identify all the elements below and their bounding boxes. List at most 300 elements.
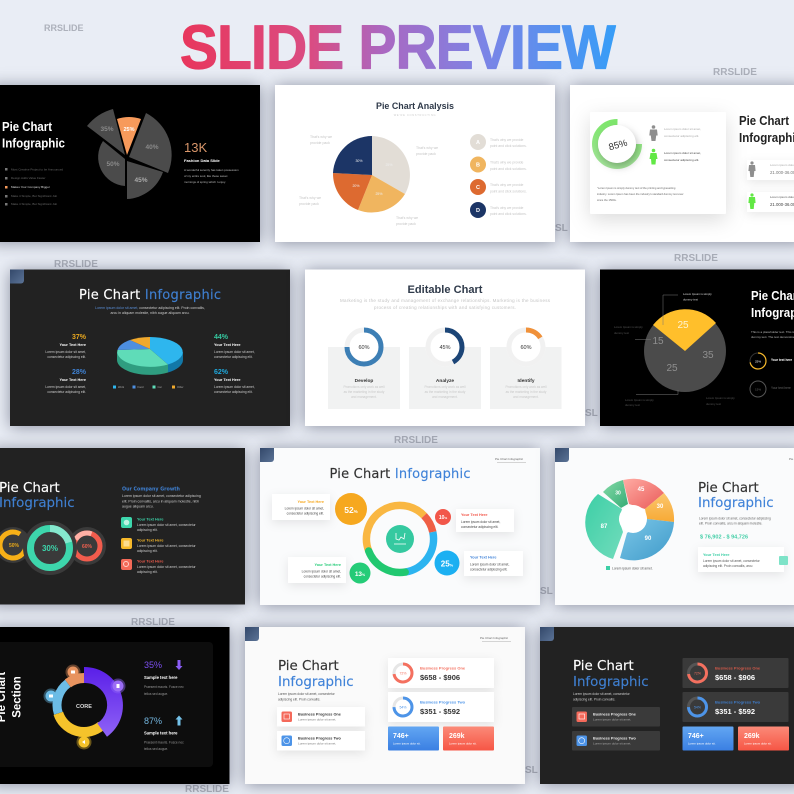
stat card one: Business Progress One [715,666,761,670]
pie legend: Car [158,385,162,389]
heading: Infographic [2,136,65,150]
progress rings [750,353,792,397]
left stats: Lorem ipsum dolor sit amet, [45,350,86,354]
callout blue [464,551,523,576]
inner panel [0,642,213,767]
ring chart [366,505,434,573]
stat 35 percent: Praesent mauris. Fusce nec [144,685,184,689]
pie labels: dummy text [614,331,629,335]
slide badge [540,627,554,641]
heading: Pie Chart Infographic [330,467,470,482]
legend: point and click solutions. [490,144,527,148]
stat card two: Business Progress Two [420,700,466,704]
stat card one: $658 - $906 [715,673,755,682]
exploded pie chart: 25% [123,127,135,133]
right stats: consectetur adipiscing elit. [214,390,253,394]
pie labels: That's why we [396,216,418,220]
bubble 10 percent: 10% [439,515,447,521]
progress rings: 25% [755,360,761,364]
legend: point and click solutions. [490,190,527,194]
heading: Pie Chart [2,119,53,134]
legend: point and click solutions. [490,167,527,171]
donut 85 percent: 85% [608,138,629,153]
callout yellow [272,494,330,520]
left stats: 28% [72,369,87,376]
pie labels: Lorem Ipsum is simply [625,398,654,402]
heading [698,481,774,511]
card develop: Promotions only work as well [343,385,385,389]
left stats: 37% [72,334,87,341]
pie legend [113,385,184,389]
heading: Editable Chart [408,284,483,296]
pie chart: 20% [352,184,360,188]
callout red [456,509,514,532]
heading: Pie Chart Analysis [376,101,454,112]
card develop: 60% [358,345,370,351]
icon: green person [650,149,658,164]
card identify [490,328,562,409]
growth item red: adipiscing elit. [137,570,158,574]
growth text: Lorem ipsum dolor sit amet, consectetur adipiscing [122,494,201,498]
slide badge [260,448,274,462]
icon: grey person [649,125,658,141]
icon: purple node [110,678,126,694]
callout [698,547,788,572]
watermarks: SL [555,223,568,234]
stat card one: $658 - $906 [420,673,460,682]
red stat box: 269k [449,733,465,740]
heading: Infographic [573,675,649,690]
right stats: 62% [214,369,229,376]
blue stat box: 746+ [688,733,704,740]
growth text: augue aliquam arcu. [122,504,154,508]
3D pie chart [117,337,183,375]
legend: D [476,208,480,214]
card progress one: Business Progress One [298,712,341,716]
donut teal 30 percent [23,521,77,575]
subtitle [95,306,205,315]
top-right tag [495,457,526,462]
rotated heading: Section [12,676,24,718]
heading: Pie Chart [698,481,759,496]
panel: business progress light slide [245,627,525,784]
card analyze: as the marketing in the study [425,390,466,394]
heading: Pie Chart [278,659,339,674]
panel: segmented pie slide [555,448,794,605]
top-right tag: Pie Chart Infographic [480,636,509,640]
legend: C [476,185,480,191]
left stats: consectetur adipiscing elit. [47,390,86,394]
pie labels [299,135,438,226]
growth item red [121,559,197,574]
card identify: 60% [520,345,532,351]
legend: That's why we provide [490,138,524,142]
slide badge [245,627,259,641]
donut teal 30 percent: 30% [42,544,58,553]
top-right tag [480,636,511,642]
heading: Infographic [278,675,354,690]
panel: core pie section slide [0,627,230,784]
pie labels: That's why we [299,196,321,200]
watermarks: RRSLIDE [131,617,175,628]
pie legend: Other [177,385,184,389]
panel: black yellow pie slide [600,270,794,426]
red stat box: Lorem ipsum dolor sit. [449,742,477,746]
leader lines [635,295,678,394]
stat card one [682,658,788,688]
pie legend: Lorem ipsum dolor sit amet. [612,566,653,570]
blue stat box: Lorem ipsum dolor sit. [393,742,421,746]
stat 13K: mornings of spring which I enjoy. [184,180,226,184]
callout: Lorem ipsum dolor sit amet, consectetur [703,559,761,563]
bubble 13 percent: 13% [355,571,366,578]
heading [573,659,649,690]
panel: pie chart analysis slide: WE'RE CONSTRUCTING [394,113,436,117]
panel: dark 3D pie slide [10,270,290,426]
pie labels: provide pack [310,141,330,145]
pie chart: 25 [677,320,689,331]
stat card one [388,658,494,688]
card progress one: Lorem ipsum dolor sit amet. [593,718,631,722]
watermarks: RRSLIDE [713,67,757,78]
stat 87 percent: Sample text here [144,730,178,736]
stat 13K [184,140,239,184]
donut yellow 50 percent [0,527,31,563]
watermarks: SL [585,408,598,419]
heading [739,113,794,145]
stat 35 percent [144,660,184,696]
heading [2,119,65,150]
pie chart: 15 [652,336,664,347]
right stats: consectetur adipiscing elit. [214,355,253,359]
card progress two: Business Progress Two [593,736,636,740]
pie labels: dummy text [683,298,698,302]
legend: That's why we provide [490,160,524,164]
subtitle: process of creating relationships with and satisfying customers. [374,305,516,310]
stat 87 percent: Praesent mauris. Fusce nec [144,740,184,744]
stat 87 percent: 87% [144,716,162,726]
pie chart [644,309,726,392]
heading: Pie Chart Infographic [79,288,221,303]
card identify: Identify [517,378,535,384]
legend: A [476,140,480,146]
progress rings: Your text here [771,386,791,390]
callout green: Your Text Here [315,563,341,567]
stat cards [747,160,794,212]
growth item teal: Lorem ipsum dolor sit amet, consectetur [137,523,197,527]
right stats: Your Text Here [214,378,240,382]
callout blue: Your Text Here [470,556,496,560]
watermarks: RRSLIDE [54,259,98,270]
heading: Infographic [698,496,774,511]
segmented pie chart: 90 [645,536,652,542]
watermarks: RRSLIDE [394,435,438,446]
growth item red: Lorem ipsum dolor sit amet, consectetur [137,565,197,569]
stat 13K: A wonderful serenity has taken possession [184,168,239,172]
panel: editable chart slide [305,270,585,426]
legend: That's why we provide [490,183,524,187]
pie labels: provide pack [416,152,436,156]
card develop: as the marketing in the study [344,390,385,394]
person text [664,127,701,162]
right stats: Lorem ipsum dolor sit amet, [214,350,255,354]
card develop: and management. [351,395,377,399]
card analyze: Analyze [436,378,454,384]
pie chart: 25% [375,192,383,196]
bubble 13 percent [350,562,370,584]
growth item teal [121,517,197,532]
legend: point and click solutions. [490,212,527,216]
stat 35 percent: Sample text here [144,675,178,680]
segmented pie chart: 30 [615,490,621,496]
watermarks: SL [540,586,553,597]
callout red: Your Text Here [461,513,487,517]
watermarks: RRSLIDE [674,253,718,264]
segmented pie chart: 30 [657,504,664,510]
person text: Lorem ipsum dolor sit amet, [664,151,701,155]
progress rings: Your text here [771,358,792,362]
bullet list: Makes Your Company Bigger [11,185,50,189]
right stats: Lorem ipsum dolor sit amet, [214,385,255,389]
growth text: elit. Proin convallis, arcu in aliquam molestie, nibh [122,500,199,504]
legend: That's why we provide [490,206,524,210]
pie labels: That's why we [416,146,438,150]
red stat box [738,726,789,750]
exploded pie chart: 40% [145,144,159,151]
panel: pie chart analysis slide [275,85,555,242]
growth item yellow: Your Text Here [137,538,163,542]
growth text [122,486,201,508]
description: adipiscing elit. Proin convallis. [278,698,320,702]
segmented pie chart: 87 [601,524,608,530]
subtitle: Marketing is the study and management of exchange relationships. Marketing is the business [340,298,551,303]
card progress two [277,731,365,750]
stat card two: 54% [399,706,407,710]
inner card [590,112,726,214]
heading: Pie Chart [0,481,60,496]
stat 87 percent: tellus sed augue. [144,747,168,751]
price range: $ 76,902 - $ 94,726 [700,534,748,540]
core ring chart: CORE [76,704,92,710]
pie chart: 25 [666,363,678,374]
stat card two: 54% [694,706,701,710]
rotated heading [0,672,24,722]
pie labels: dummy text [625,403,640,407]
card develop [328,328,400,409]
icon: orange node [66,664,80,680]
watermarks: RRSLIDE [44,23,84,33]
bullet list: Make it Simple, But Significant Job [11,194,58,198]
panel: ring infographic slide [260,448,540,605]
stat 13K: 13K [184,140,207,155]
legend [470,134,527,218]
bubble 52 percent: 52% [344,505,358,515]
slide badge [10,270,24,284]
card progress two: Lorem ipsum dolor sit amet. [593,742,631,746]
pie legend: Work [118,385,125,389]
panel: company growth dark slide [0,448,245,604]
bubble 25 percent: 25% [441,560,454,568]
donut note [597,186,684,202]
callout: Your Text Here [703,553,729,557]
subtitle [340,298,551,310]
pie chart: 30% [355,159,363,163]
stat card two: $351 - $592 [715,707,755,716]
right stats [214,334,255,394]
bubble 10 percent [435,509,451,525]
exploded pie chart: 45% [134,177,148,184]
pie labels [614,292,735,407]
card analyze [409,328,481,409]
stat 35 percent: 35% [144,660,162,670]
callout yellow: consectetur adipiscing elit. [287,512,324,516]
donut yellow 50 percent: 50% [9,543,20,549]
title: SLIDE PREVIEW [180,14,616,82]
left stats: Your Text Here [60,378,86,382]
description: Lorem ipsum dolor sit amet, consectetur adipiscing [699,516,771,520]
icon: yellow node [76,734,92,750]
callout red: Lorem ipsum dolor sit amet, [461,520,500,524]
exploded pie chart [87,109,172,199]
stat card one: Business Progress One [420,666,466,670]
core ring chart [57,667,123,737]
callout: adipiscing elit. Proin convallis, arcu [703,564,753,568]
description: elit. Proin convallis, arcu in aliquam molestie. [699,522,763,526]
card develop: Develop [355,378,373,384]
donut note: "Lorem Ipsum is simply dummy text of the printing and typesetting [597,186,676,190]
callout green: Lorem ipsum dolor sit amet, [302,570,341,574]
segmented pie chart [585,479,674,560]
red stat box [443,726,494,750]
callout blue: consectetur adipiscing elit. [470,568,507,572]
card progress two: Business Progress Two [298,736,341,740]
bullet list [5,168,63,206]
description [699,516,771,526]
description: Lorem ipsum dolor sit amet, consectetur [573,692,631,696]
heading [751,288,794,320]
pie labels: provide pack [299,202,319,206]
callout green [288,557,346,583]
bullet list: Make it Simple, But Significant Job [11,202,58,206]
left stats: Lorem ipsum dolor sit amet, [45,385,86,389]
exploded pie chart: 50% [106,161,120,168]
card progress one [572,707,660,726]
icon: blue node [44,688,58,704]
card identify: and management. [513,395,539,399]
callout green: consectetur adipiscing elit. [304,574,341,578]
stat card one: 72% [399,672,407,676]
pie labels: Lorem Ipsum is simply [683,292,712,296]
red stat box: Lorem ipsum dolor sit. [744,742,772,746]
person text: consectetur adipiscing elit. [664,158,699,162]
left stats: consectetur adipiscing elit. [47,355,86,359]
pie labels: Lorem Ipsum is simply [706,396,735,400]
callout yellow: Lorem ipsum dolor sit amet, [285,506,324,510]
description [573,692,631,702]
exploded pie chart: 35% [100,126,114,133]
panel: dark exploded pie slide [0,85,260,242]
pie chart: 25% [385,163,393,167]
top-right tag: Pie Chart Infographic [495,457,524,461]
person text: Lorem ipsum dolor sit amet, [664,127,701,131]
stat card two: $351 - $592 [420,707,460,716]
blue stat box [682,726,734,750]
card progress one: Lorem ipsum dolor sit amet. [298,718,336,722]
card analyze: Promotions only work as well [424,385,466,389]
blue stat box: Lorem ipsum dolor sit. [688,742,716,746]
watermarks: SL [525,765,538,776]
pie chart [333,136,410,213]
progress rings: 15% [755,388,761,392]
callout blue: Lorem ipsum dolor sit amet, [470,562,509,566]
heading [0,481,75,511]
slide badge [555,448,569,462]
donut red 60 percent: 60% [82,544,93,550]
subtitle: Lorem ipsum dolor sit amet, consectetur adipiscing elit. Proin convallis, [95,306,205,310]
donut note: industry. Lorem Ipsum has been the industry's standard dummy text ever [597,192,684,196]
right stats: Your Text Here [214,343,240,347]
growth item yellow [121,538,197,553]
stat card two [682,692,788,722]
subtitle: arcu in aliquam molestie, nibh augue aliquam arcu. [110,311,190,315]
pie labels: provide pack [396,222,416,226]
donut note: since the 1500s. [597,198,617,202]
card progress two [572,731,660,750]
pie legend: Food [138,385,144,389]
stat 87 percent [144,716,184,751]
growth item teal: adipiscing elit. [137,528,158,532]
stat card two [388,692,494,722]
card progress one: Business Progress One [593,712,636,716]
card analyze: and management. [432,395,458,399]
bubble 52 percent [335,493,367,525]
heading: Pie Chart [573,659,634,674]
card identify: Promotions only work as well [505,385,547,389]
growth item red: Your Text Here [137,560,163,564]
card progress two: Lorem ipsum dolor sit amet. [298,742,336,746]
panel: 85 percent donut slide [570,85,794,242]
description: adipiscing elit. Proin convallis. [573,698,615,702]
bullet list: Most Creative Project to be Announced [11,168,63,172]
blue stat box [388,726,439,750]
stat 35 percent: tellus sed augue. [144,692,168,696]
card analyze: 45% [439,345,451,351]
callout red: consectetur adipiscing elit. [461,525,498,529]
person text: consectetur adipiscing elit. [664,134,699,138]
left stats: Your Text Here [60,343,86,347]
stat card two: Business Progress Two [715,700,761,704]
callout yellow: Your Text Here [298,500,324,504]
growth item yellow: adipiscing elit. [137,549,158,553]
left stats [45,334,87,394]
red stat box: 269k [744,733,760,740]
heading: Infographic [0,496,75,511]
pie labels: That's why we [310,135,332,139]
bullet list: Design Adds Value Faster [11,176,45,180]
panel: business progress dark slide [540,627,794,784]
heading [278,659,354,690]
donut red 60 percent [68,527,106,565]
stat card one: 72% [694,672,701,676]
icon: center chart [386,525,414,553]
pie chart: 35 [702,350,714,361]
pie labels: dummy text [706,402,721,406]
stat 13K: of my entire soul, like these sweet [184,174,228,178]
pie labels: Lorem Ipsum is simply [614,325,643,329]
card progress one [277,707,365,726]
right stats: 44% [214,334,229,341]
donut 85 percent [595,122,639,166]
